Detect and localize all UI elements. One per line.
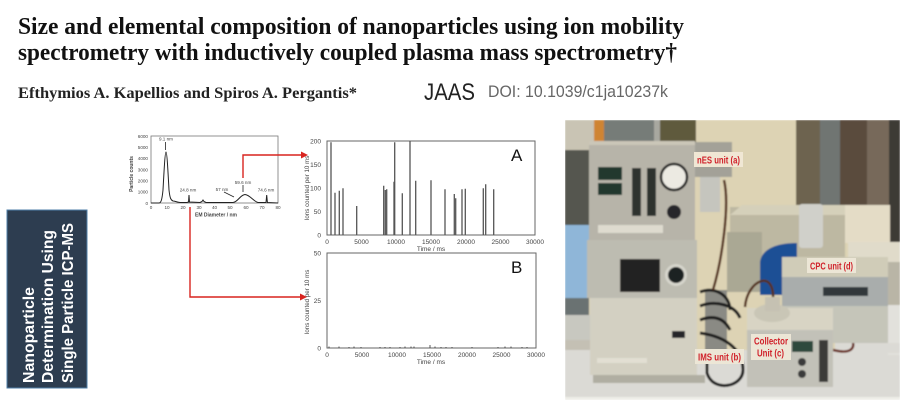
blue chair	[760, 243, 797, 295]
chart B: ions counted	[304, 250, 545, 366]
chart: size distribution: Particle counts	[129, 156, 135, 192]
chart: size distribution: 50	[227, 205, 233, 210]
title: spectrometry with inductively coupled plasma mass spectrometry†	[18, 40, 677, 66]
chart A: ions counted: 30000	[526, 239, 544, 246]
chart: size distribution: 60	[243, 205, 249, 210]
axis labels: 1000	[138, 190, 148, 194]
axis labels: 3000	[138, 168, 148, 172]
DOI: DOI: 10.1039/c1ja10237k	[488, 83, 669, 101]
chart A: ions counted: 25000	[491, 239, 510, 246]
tick labels A: 200	[310, 138, 321, 146]
tick labels B: 50	[314, 250, 321, 258]
spikes A	[331, 141, 494, 235]
peak markers	[166, 142, 243, 197]
axis labels: 2000	[138, 178, 148, 184]
title	[18, 14, 684, 66]
axis labels: 5000	[138, 145, 148, 150]
table	[565, 350, 900, 400]
chart A: ions counted: Ions counted per 10 ms	[304, 156, 311, 220]
chart: size distribution: EM Diameter / nm	[195, 212, 238, 218]
chart: size distribution: 70	[259, 205, 265, 210]
label: collector unit: Collector	[754, 336, 788, 348]
chart: size distribution	[129, 134, 281, 218]
label: IMS unit: IMS unit (b)	[698, 352, 741, 364]
photo: instrument setup	[565, 120, 900, 400]
chart: size distribution: 9.1 nm	[159, 136, 173, 142]
tick labels A	[310, 138, 321, 240]
tick labels B	[314, 250, 321, 352]
chart A: ions counted: 15000	[422, 239, 440, 246]
chart A: ions counted: 5000	[354, 239, 369, 246]
label: nES unit	[694, 152, 743, 167]
panel: sidebar title: Determination Using	[40, 230, 57, 383]
panel: sidebar title	[7, 210, 87, 388]
panel letter B: B	[511, 258, 522, 277]
axis labels	[138, 134, 148, 206]
chart B: ions counted: Time / ms	[417, 359, 446, 366]
journal name: JAAS	[424, 79, 475, 106]
arrow: 24.8 nm peak to chart B	[190, 207, 307, 300]
chiller	[730, 207, 845, 262]
label: IMS unit	[695, 349, 744, 364]
chart: size distribution: 0	[150, 205, 153, 210]
chart: size distribution: 40	[212, 205, 217, 210]
chart A: ions counted	[304, 138, 544, 253]
axis labels: 4000	[138, 156, 148, 161]
IMS lower chassis	[590, 298, 697, 375]
chart B: ions counted: 25000	[492, 352, 511, 359]
chart B: ions counted: 0	[325, 352, 329, 359]
chart B: ions counted: 20000	[458, 352, 476, 359]
chart: size distribution: 59.6 nm	[235, 180, 251, 185]
panel letter A: A	[511, 146, 523, 165]
tick labels B: 25	[314, 298, 321, 305]
chart B: ions counted: 30000	[527, 352, 545, 359]
authors: Efthymios A. Kapellios and Spiros A. Pergantis*	[18, 85, 357, 102]
collector chassis	[746, 330, 834, 388]
title: Size and elemental composition of nanoparticles using ion mobility	[18, 14, 684, 40]
chart B: ions counted: Ions counted per 10 ms	[304, 270, 311, 334]
IMS upper chassis	[587, 240, 697, 298]
tick labels A: 50	[314, 209, 321, 216]
spikes B	[329, 345, 527, 348]
chart: size distribution: 57 nm	[216, 187, 229, 192]
chart: size distribution: 20	[180, 205, 186, 210]
arrow: 59.6 nm peak to chart A	[243, 152, 308, 178]
label: CPC unit: CPC unit (d)	[810, 260, 853, 272]
tick labels A: 100	[310, 186, 321, 192]
chart B: ions counted: 5000	[355, 352, 370, 359]
nES chassis	[593, 140, 696, 146]
axis labels: 0	[145, 201, 148, 206]
panel: sidebar title: Nanoparticle	[21, 287, 38, 383]
chart B: ions counted: 15000	[423, 352, 441, 359]
label: collector unit	[751, 334, 791, 360]
chart: size distribution: 24.8 nm	[180, 188, 196, 192]
panel: sidebar title: Single Particle ICP-MS	[60, 223, 77, 383]
chart: size distribution: 80	[275, 205, 281, 210]
tick labels B: 0	[317, 346, 321, 352]
chart: size distribution: 74.6 nm	[258, 188, 274, 192]
curve: particle counts	[151, 152, 278, 203]
chart A: ions counted: Time / ms	[417, 246, 446, 253]
chart: size distribution: 10	[164, 205, 170, 210]
chart B: ions counted: 10000	[388, 352, 406, 359]
axis labels: 6000	[138, 134, 148, 139]
label: nES unit: nES unit (a)	[697, 154, 740, 166]
label: collector unit: Unit (c)	[757, 348, 784, 360]
tick labels A: 0	[317, 232, 321, 240]
chart: size distribution: 30	[196, 205, 202, 210]
CPC chassis	[782, 257, 888, 278]
chart A: ions counted: 0	[325, 239, 329, 246]
tick labels A: 150	[310, 162, 321, 169]
label: CPC unit	[807, 258, 856, 273]
chart A: ions counted: 20000	[457, 239, 475, 246]
chart A: ions counted: 10000	[387, 239, 405, 246]
cables and column	[705, 290, 727, 352]
